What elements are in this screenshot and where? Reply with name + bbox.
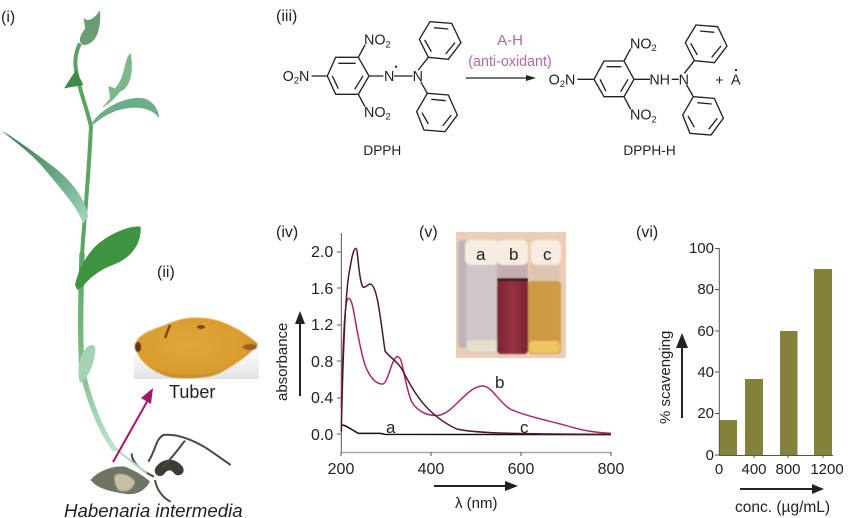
y tick labels: 40 [697, 364, 714, 381]
y tick labels: 20 [697, 405, 714, 422]
reaction scheme: DPPH: NO [364, 105, 385, 121]
y tick labels: 0.0 [311, 427, 333, 444]
reaction scheme: DPPH: N [384, 69, 394, 85]
x tick labels: 600 [508, 461, 534, 478]
x tick labels [715, 461, 844, 478]
reaction scheme: DPPH-H: 2 [651, 43, 657, 53]
y tick labels [311, 244, 333, 444]
y axis title and arrow: % scavenging [657, 331, 674, 424]
reaction scheme: DPPH-H: 2 [560, 79, 565, 89]
label (ii): (ii) [157, 264, 175, 281]
axes [337, 233, 611, 456]
label (iii): (iii) [276, 8, 297, 25]
y axis title and arrow [657, 331, 688, 424]
curve labels: b [495, 373, 504, 392]
reaction scheme: DPPH-H: O [549, 72, 560, 88]
x axis title and arrow: λ (nm) [455, 495, 498, 512]
reaction scheme: DPPH-H: N [565, 72, 575, 88]
reaction scheme: DPPH-H: + [715, 71, 724, 87]
reaction arrow with A-H (anti-oxidant) [466, 32, 552, 81]
scavenging bar chart [657, 240, 844, 516]
reaction scheme: DPPH-H: NH [649, 72, 670, 88]
reaction scheme: DPPH [283, 22, 461, 158]
reaction scheme: DPPH-H: DPPH-H [623, 143, 676, 158]
x axis title and arrow [735, 484, 830, 516]
reaction scheme: DPPH-H: 2 [651, 114, 657, 124]
x tick labels: 800 [598, 461, 624, 478]
reaction scheme: DPPH-H: A [731, 72, 741, 88]
reaction scheme: DPPH: NO [364, 33, 385, 49]
tuber photo [134, 318, 259, 379]
reaction scheme: DPPH: DPPH [363, 143, 401, 158]
reaction scheme: DPPH: O [283, 69, 294, 85]
curve labels: c [520, 418, 529, 437]
y axis title and arrow: absorbance [274, 323, 291, 401]
y tick labels [689, 240, 714, 464]
x tick labels: 1200 [810, 461, 844, 478]
y tick labels: 0 [706, 447, 714, 464]
y tick labels: 60 [697, 323, 714, 340]
reaction arrow with A-H (anti-oxidant): A-H [497, 32, 523, 49]
x tick labels [328, 461, 624, 478]
x tick labels: 400 [418, 461, 444, 478]
reaction scheme: DPPH: N [413, 69, 423, 85]
y tick labels: 2.0 [311, 244, 333, 261]
y tick labels: 1.6 [311, 281, 333, 298]
reaction scheme: DPPH: 2 [294, 76, 299, 86]
curve labels: a [386, 418, 396, 437]
reaction scheme: DPPH-H [549, 25, 741, 158]
axes [715, 248, 833, 458]
arrow: plant to tuber [113, 388, 153, 462]
curves a, b, c [341, 248, 611, 435]
label (vi): (vi) [636, 224, 658, 241]
reaction scheme: DPPH: 2 [385, 39, 391, 49]
vials photo: b [509, 245, 518, 264]
y tick labels: 100 [689, 240, 714, 257]
vials photo [456, 232, 566, 358]
reaction scheme: DPPH: N [299, 69, 309, 85]
y axis title and arrow [274, 311, 305, 401]
vials photo: a [476, 245, 486, 264]
y tick labels: 0.8 [311, 354, 333, 371]
label (i): (i) [1, 9, 15, 26]
x tick labels: 800 [775, 461, 801, 478]
x tick labels: 200 [328, 461, 354, 478]
caption: Tuber: Tuber [169, 382, 215, 402]
x tick labels: 400 [741, 461, 767, 478]
absorbance line chart [274, 233, 624, 512]
plant photo: Habenaria intermedia [2, 10, 231, 502]
reaction scheme: DPPH-H: N [679, 72, 689, 88]
x tick labels: 0 [715, 461, 723, 478]
vials photo: c [543, 245, 552, 264]
y tick labels: 1.2 [311, 317, 333, 334]
reaction scheme: DPPH-H: NO [630, 108, 651, 124]
curve labels [386, 373, 529, 437]
y tick labels: 80 [697, 281, 714, 298]
reaction scheme: DPPH: 2 [385, 112, 391, 122]
y tick labels: 0.4 [311, 390, 333, 407]
label (iv): (iv) [276, 224, 298, 241]
bars [720, 269, 832, 455]
label (v): (v) [419, 224, 438, 241]
reaction arrow with A-H (anti-oxidant): (anti-oxidant) [468, 54, 552, 70]
x axis title and arrow: conc. (µg/mL) [735, 499, 830, 516]
reaction scheme: DPPH-H: NO [630, 36, 651, 52]
x axis title and arrow [434, 481, 518, 512]
